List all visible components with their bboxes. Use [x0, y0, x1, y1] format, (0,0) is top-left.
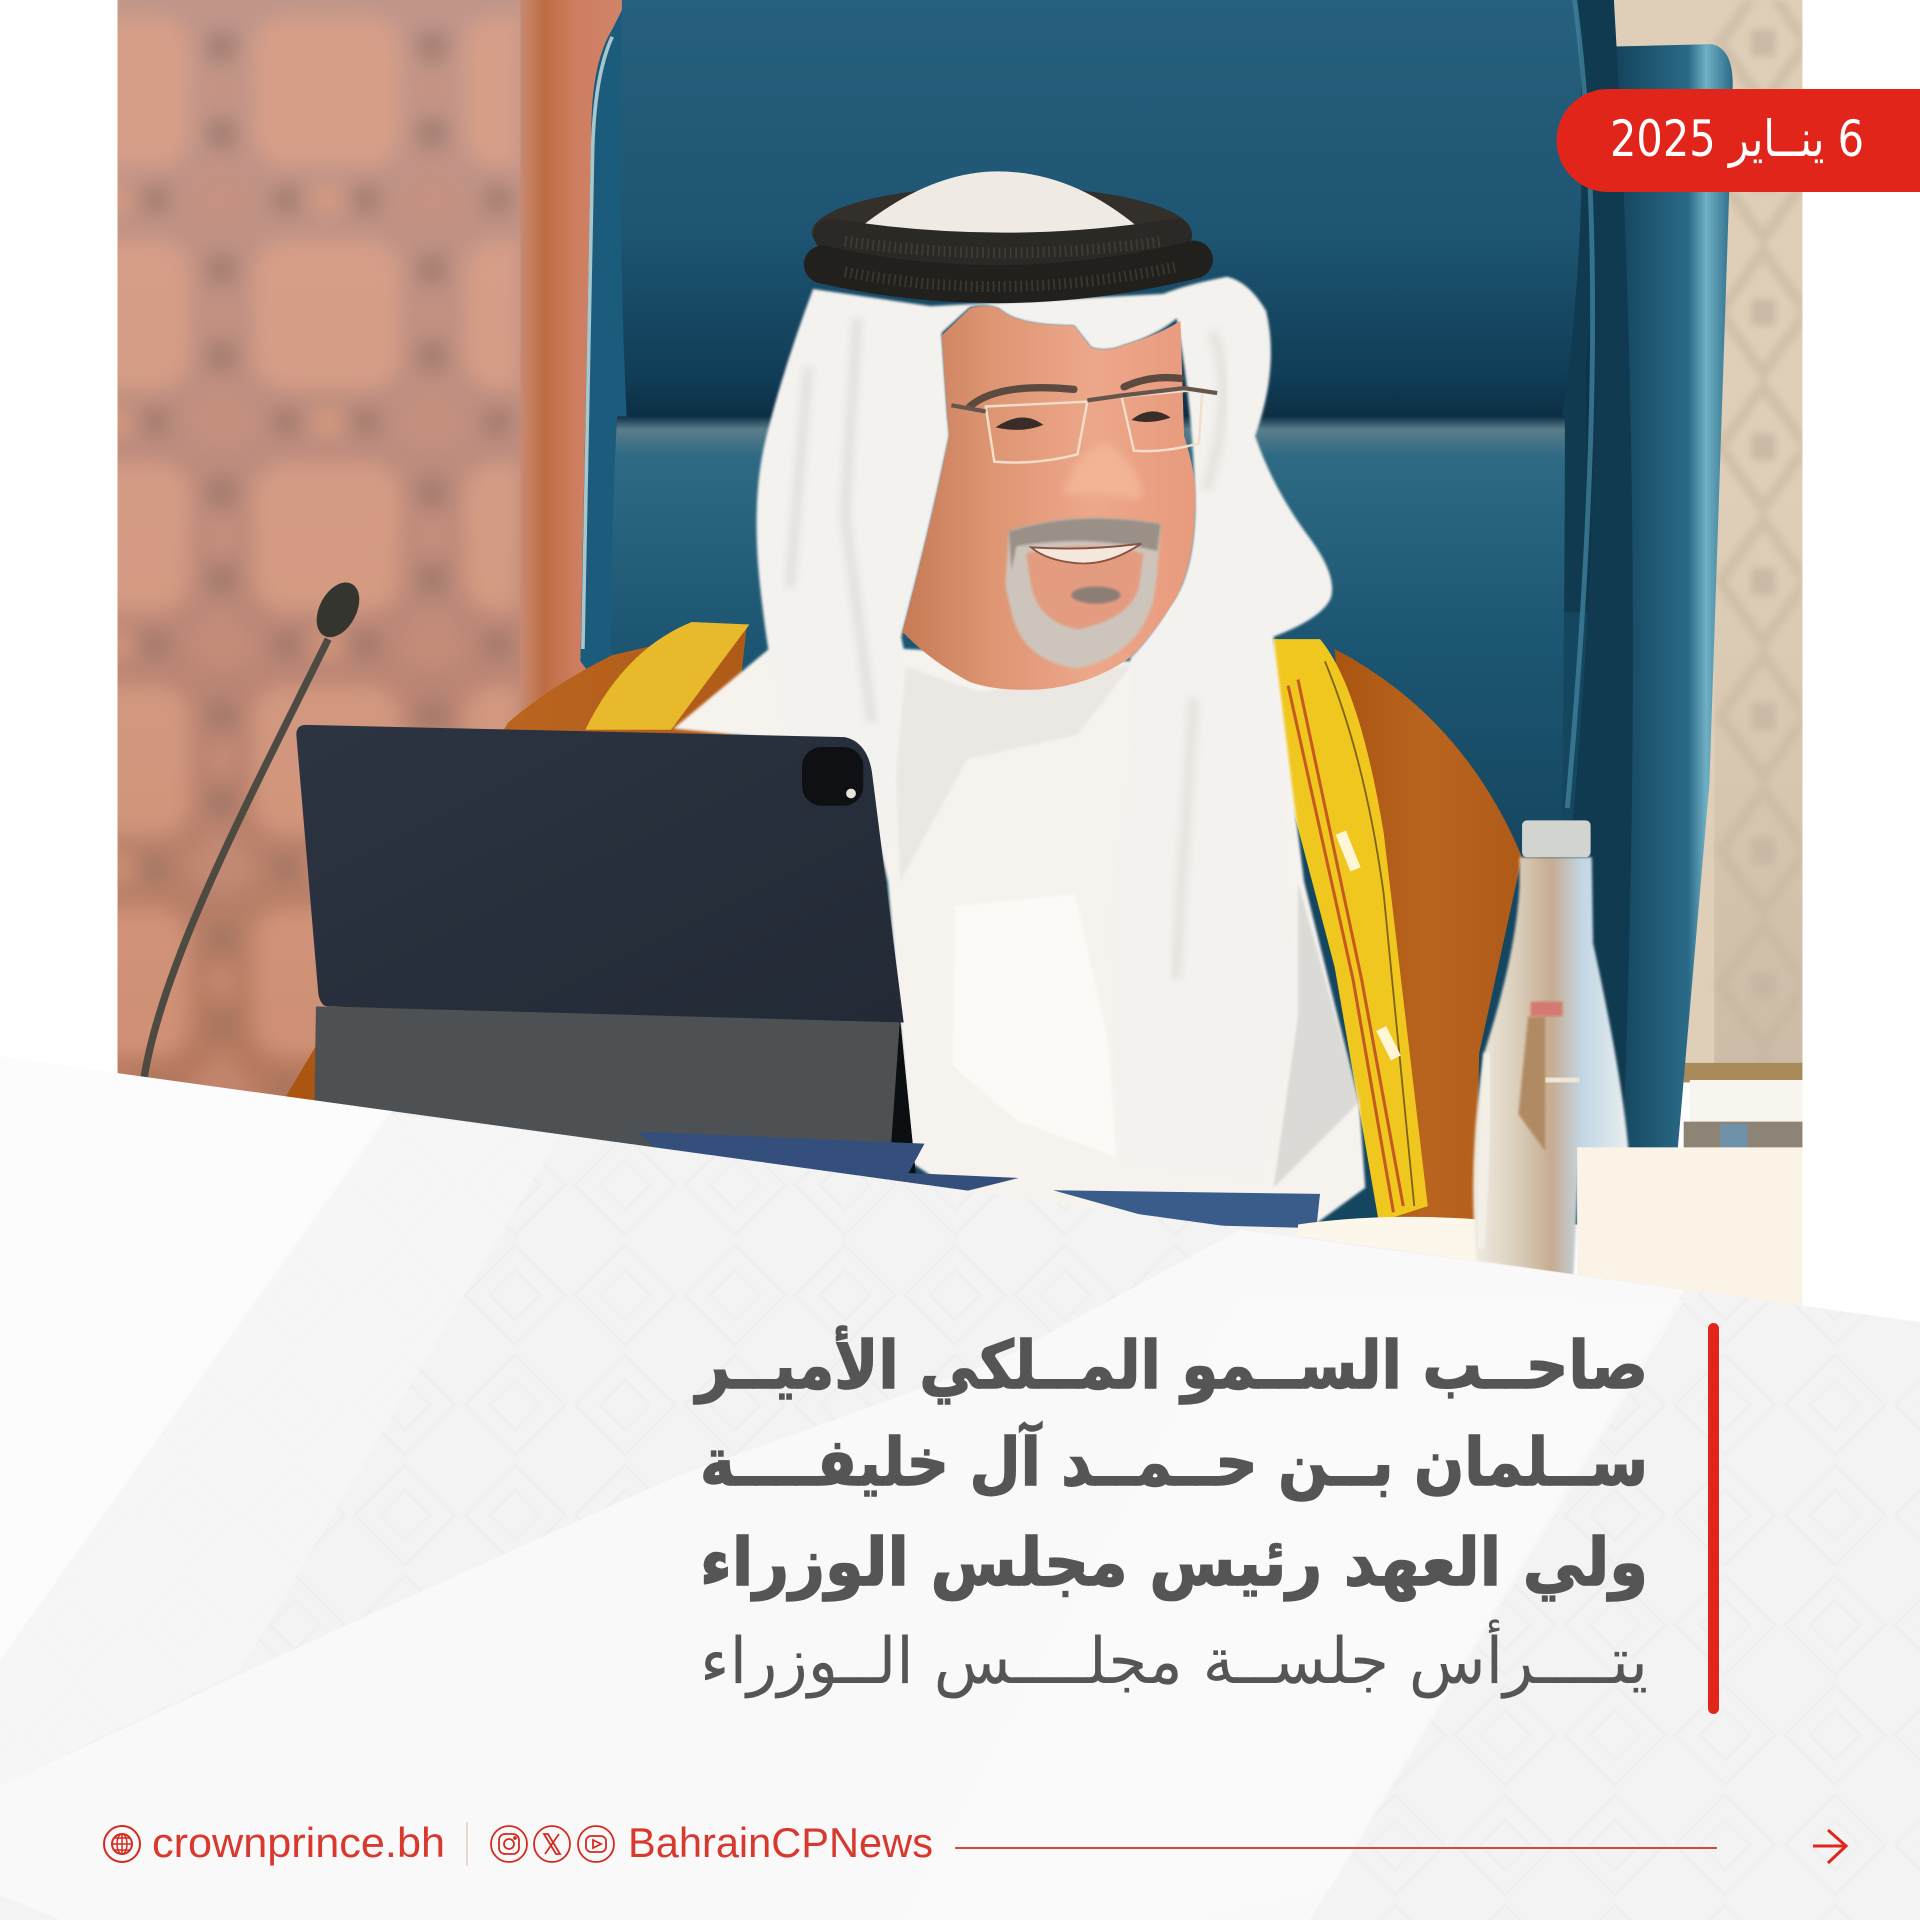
face	[902, 306, 1217, 690]
photo: Crown Prince seated at cabinet table	[98, 0, 1802, 1347]
cream box on table	[1577, 1147, 1802, 1313]
date badge	[1556, 89, 1920, 192]
icon: youtube	[578, 1826, 614, 1862]
white thobe and ghutra	[673, 277, 1365, 1237]
headline line 4: يتــــرأس جلســة مجلــــس الــوزراء	[700, 1619, 1648, 1699]
icon: X	[534, 1826, 570, 1862]
headline line 3: ولي العهد رئيس مجلس الوزراء	[700, 1524, 1648, 1602]
wall with lattice pattern	[118, 0, 622, 1096]
eyes	[996, 411, 1171, 430]
beard	[1005, 518, 1161, 669]
footer bar	[104, 1819, 1846, 1866]
headline line 1: صاحــب الســمو المــلكي الأميــر	[693, 1325, 1648, 1405]
mouth	[1031, 544, 1141, 564]
chair	[580, 0, 1733, 1224]
icon: instagram	[491, 1826, 527, 1862]
social handle text: BahrainCPNews	[628, 1819, 933, 1866]
arrow	[1813, 1830, 1846, 1863]
bisht robe	[284, 624, 1522, 1231]
right wall	[1598, 0, 1802, 1082]
blue folders	[637, 1131, 1320, 1228]
date badge: 6 ينــاير 2025	[1610, 110, 1864, 168]
bottom white panel with faint shards and pattern	[0, 1050, 1920, 1920]
table and cream box	[1298, 1080, 1802, 1261]
headline line 2: ســلمان بــن حــمــد آل خليفــــة	[700, 1421, 1648, 1501]
gold trim	[585, 622, 1428, 1222]
water bottle	[1473, 820, 1629, 1276]
skull cap and igal headband	[812, 171, 1194, 287]
website text: crownprince.bh	[152, 1819, 445, 1866]
red accent bar	[1708, 1323, 1719, 1714]
tablet	[296, 725, 916, 1176]
eyebrows	[970, 378, 1180, 407]
microphone	[143, 575, 368, 1084]
divider	[466, 1822, 468, 1866]
footer rule	[955, 1847, 1717, 1849]
headline text block	[693, 1325, 1648, 1699]
icon: globe	[104, 1826, 140, 1862]
glasses	[951, 388, 1217, 463]
